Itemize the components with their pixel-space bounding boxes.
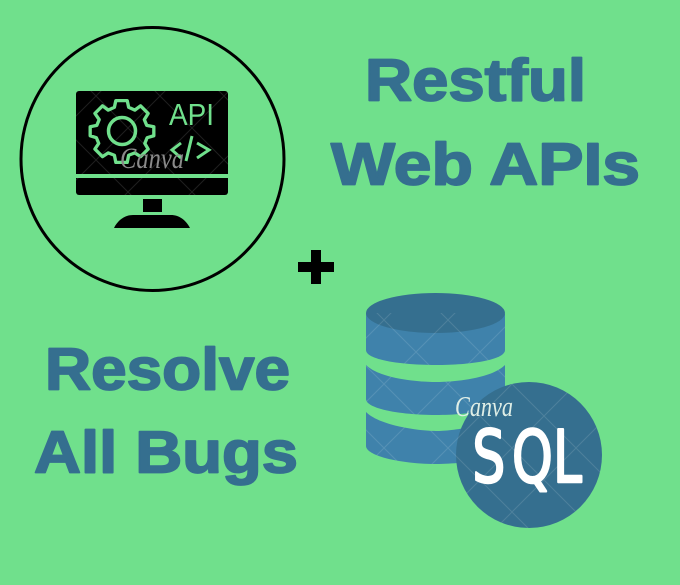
icon: SQL badge bbox=[456, 382, 602, 528]
heading: Web APIs: Web APIs bbox=[331, 132, 640, 198]
heading: All Bugs: All Bugs bbox=[34, 420, 298, 486]
top ellipse bbox=[366, 293, 505, 333]
heading: Restful: Restful bbox=[365, 48, 586, 114]
middle disk bbox=[366, 365, 505, 415]
API label: API bbox=[169, 97, 214, 132]
heading: Resolve: Resolve bbox=[45, 336, 290, 402]
icon: API monitor in circle bbox=[21, 28, 284, 290]
watermark: Canva on monitor: Canva bbox=[120, 142, 184, 175]
bottom disk bbox=[366, 412, 505, 464]
monitor stand bbox=[114, 199, 190, 228]
monitor lower bezel bbox=[76, 178, 228, 195]
icon: database bbox=[366, 293, 505, 464]
monitor screen bbox=[76, 91, 228, 174]
icon: plus bbox=[298, 250, 334, 284]
SQL label: SQL bbox=[472, 415, 582, 499]
watermark: Canva on database: Canva bbox=[455, 391, 513, 423]
icon: gear bbox=[90, 101, 154, 162]
top disk bbox=[366, 313, 505, 365]
code symbol bbox=[172, 136, 209, 161]
